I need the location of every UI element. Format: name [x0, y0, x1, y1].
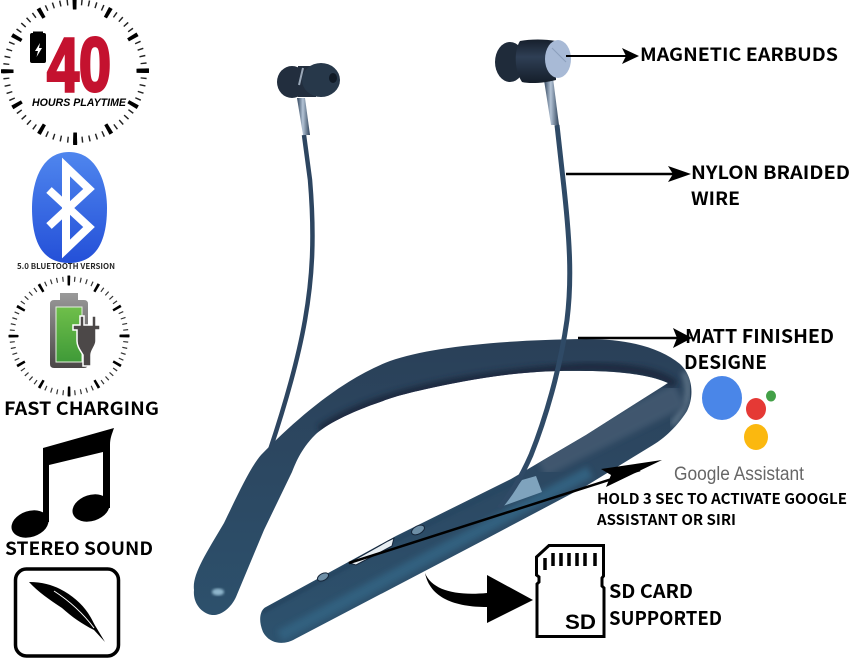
left wire — [270, 135, 312, 450]
bluetooth version label: 5.0 BLUETOOTH VERSION — [17, 261, 115, 272]
magnetic earbuds label: MAGNETIC EARBUDS — [640, 41, 838, 67]
icon: black battery with bolt — [30, 32, 46, 63]
hold to activate label — [596, 488, 847, 530]
right earbud — [495, 40, 571, 125]
sd card supported label: SD CARD — [609, 577, 693, 604]
callout: curved arrow to SD card — [425, 573, 533, 623]
neckband buttons — [316, 523, 426, 583]
icon: fast charging clock — [12, 279, 126, 393]
nylon braided wire label: NYLON BRAIDED — [691, 159, 850, 185]
hold to activate label: ASSISTANT OR SIRI — [596, 509, 736, 530]
nylon braided wire label — [691, 159, 850, 211]
fast charging label: FAST CHARGING — [4, 395, 159, 421]
icon: SD card — [536, 546, 604, 636]
matt finished design label: MATT FINISHED — [685, 322, 834, 349]
earphone product — [194, 40, 691, 643]
icon: bluetooth badge — [32, 152, 107, 263]
google assistant wordmark: Google Assistant — [674, 464, 805, 485]
left earbud — [277, 63, 340, 135]
icon: feather in rounded box — [16, 569, 118, 656]
silver slider section — [503, 476, 542, 506]
sd card supported label — [609, 577, 722, 631]
icon: plug — [73, 316, 100, 366]
right wire — [499, 125, 570, 508]
sd card supported label: SUPPORTED — [609, 604, 722, 631]
stereo sound label: STEREO SOUND — [5, 535, 153, 561]
callout: nylon braided wire arrow — [566, 166, 691, 182]
icon: google assistant dots — [702, 376, 776, 450]
icon: music note — [8, 428, 114, 542]
icon: SD card: SD — [565, 611, 596, 634]
icon: 40 hours playtime clock — [6, 2, 144, 140]
matt finished design label — [684, 322, 834, 375]
nylon braided wire label: WIRE — [691, 185, 740, 211]
callout: matt finish arrow — [578, 328, 692, 348]
callout: magnetic earbuds arrow — [566, 48, 639, 64]
callout: button arrow — [349, 460, 662, 563]
hold to activate label: HOLD 3 SEC TO ACTIVATE GOOGLE — [597, 488, 847, 509]
neckband — [194, 339, 691, 643]
red number 40: 40 — [47, 23, 111, 108]
matt finished design label: DESIGNE — [684, 348, 767, 375]
icon: battery — [50, 293, 88, 368]
hours playtime label: HOURS PLAYTIME — [32, 97, 127, 109]
